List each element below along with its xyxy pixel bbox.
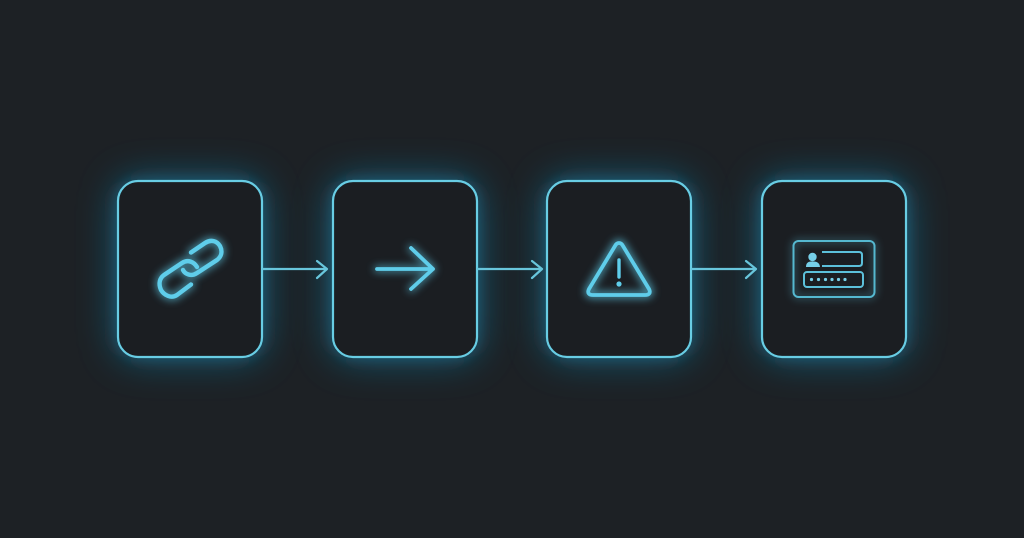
icon: right arrow [377,248,433,289]
icon: warning triangle [588,243,650,295]
panel: login form step [762,181,906,357]
panel: warning step [547,181,691,357]
username field [822,252,862,266]
panel: arrow step [333,181,477,357]
arrow: step 2 to step 3 [478,261,542,278]
panel: link step [118,181,262,357]
icon: chain link [160,241,221,297]
icon: login card [794,241,874,297]
arrow: step 1 to step 2 [263,261,327,278]
icon: user avatar [806,253,820,267]
password field [804,272,863,287]
arrow: step 3 to step 4 [692,261,756,278]
password dots [810,278,847,281]
